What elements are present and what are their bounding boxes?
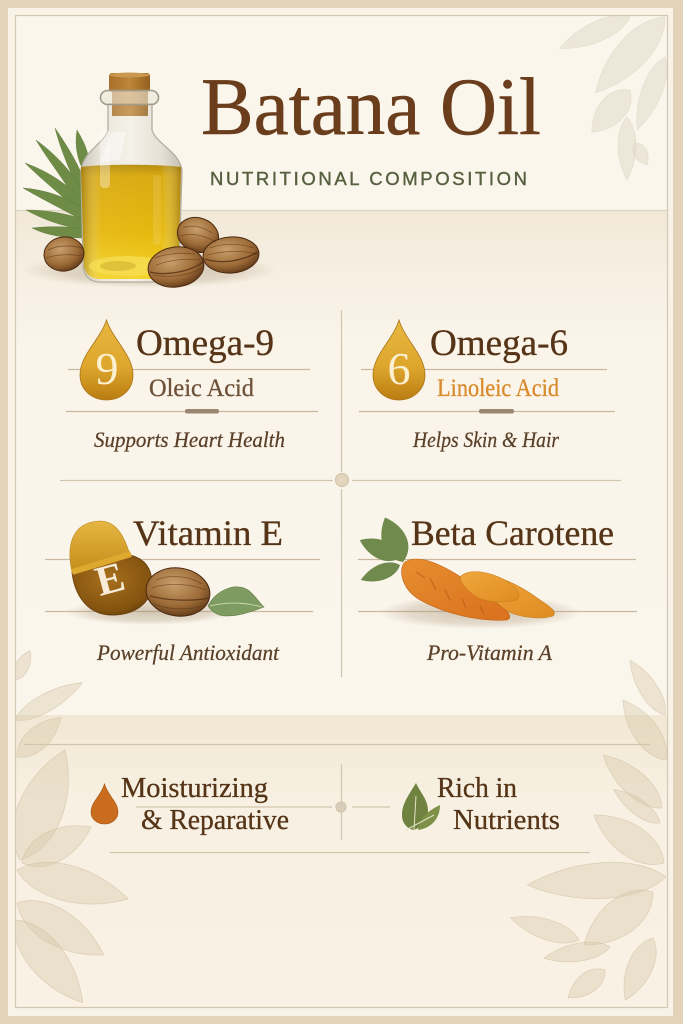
heading: Beta Carotene [411,513,614,553]
header background [16,16,667,210]
decorative leaves: bottom left [16,650,129,1004]
subheading: Oleic Acid [149,375,254,402]
icon: golden drop 9: 9 [96,343,118,394]
ground shadow [22,252,278,288]
icon: vitamin E capsule [70,521,152,615]
shadow [65,599,235,625]
subtitle: NUTRITIONAL COMPOSITION [210,168,527,189]
heading: Omega-6 [430,323,568,364]
callout text: Nutrients [453,805,560,836]
callout text: Moisturizing [121,773,268,804]
icon: carrots [402,559,554,620]
icon: nut [143,564,213,620]
benefit: Powerful Antioxidant [96,640,280,665]
icon: vitamin E capsule: E [91,554,130,606]
oil [81,165,181,279]
icon: green leaves [402,783,440,830]
cork [112,92,148,116]
title: Batana Oil [201,61,541,152]
benefit: Pro-Vitamin A [426,640,553,665]
callout text [121,773,289,836]
callout: moisturizing and reparative [91,773,289,836]
divider: centre vertical and horizontal with node [60,310,621,677]
palm frond [23,128,89,238]
callout text: & Reparative [141,805,289,836]
illustration: oil bottle with palm and nuts [22,72,278,291]
icon: carrot greens [356,513,414,587]
middle background [16,211,667,715]
heading: Vitamin E [133,513,283,553]
ornament [185,409,219,414]
icon: golden drop 6 [373,320,425,400]
icon: green leaf [208,587,264,616]
footer rules [24,744,650,852]
highlight [100,132,126,162]
callout: rich in nutrients [402,773,560,836]
decorative leaves: top right [559,16,667,180]
panel: omega-6 [359,320,615,452]
nuts [42,212,260,291]
footer background [16,715,667,1007]
bottle glass [81,104,182,282]
benefit: Helps Skin & Hair [412,427,559,452]
ornament [479,409,514,414]
panel: omega-9 [66,320,318,452]
bottle lip [100,90,158,104]
decorative leaves: bottom right [507,655,676,1006]
heading: Omega-9 [136,323,274,364]
icon: golden drop 9 [80,320,133,400]
icon: amber drop [91,784,118,824]
panel: beta carotene [356,513,637,665]
icon: golden drop 6: 6 [388,343,410,394]
callout text [437,773,560,836]
callout text: Rich in [437,773,517,804]
nut ridges [46,226,257,276]
benefit: Supports Heart Health [94,427,285,452]
panel: vitamin E [45,513,320,665]
shadow [378,595,582,629]
subheading: Linoleic Acid [437,375,559,402]
